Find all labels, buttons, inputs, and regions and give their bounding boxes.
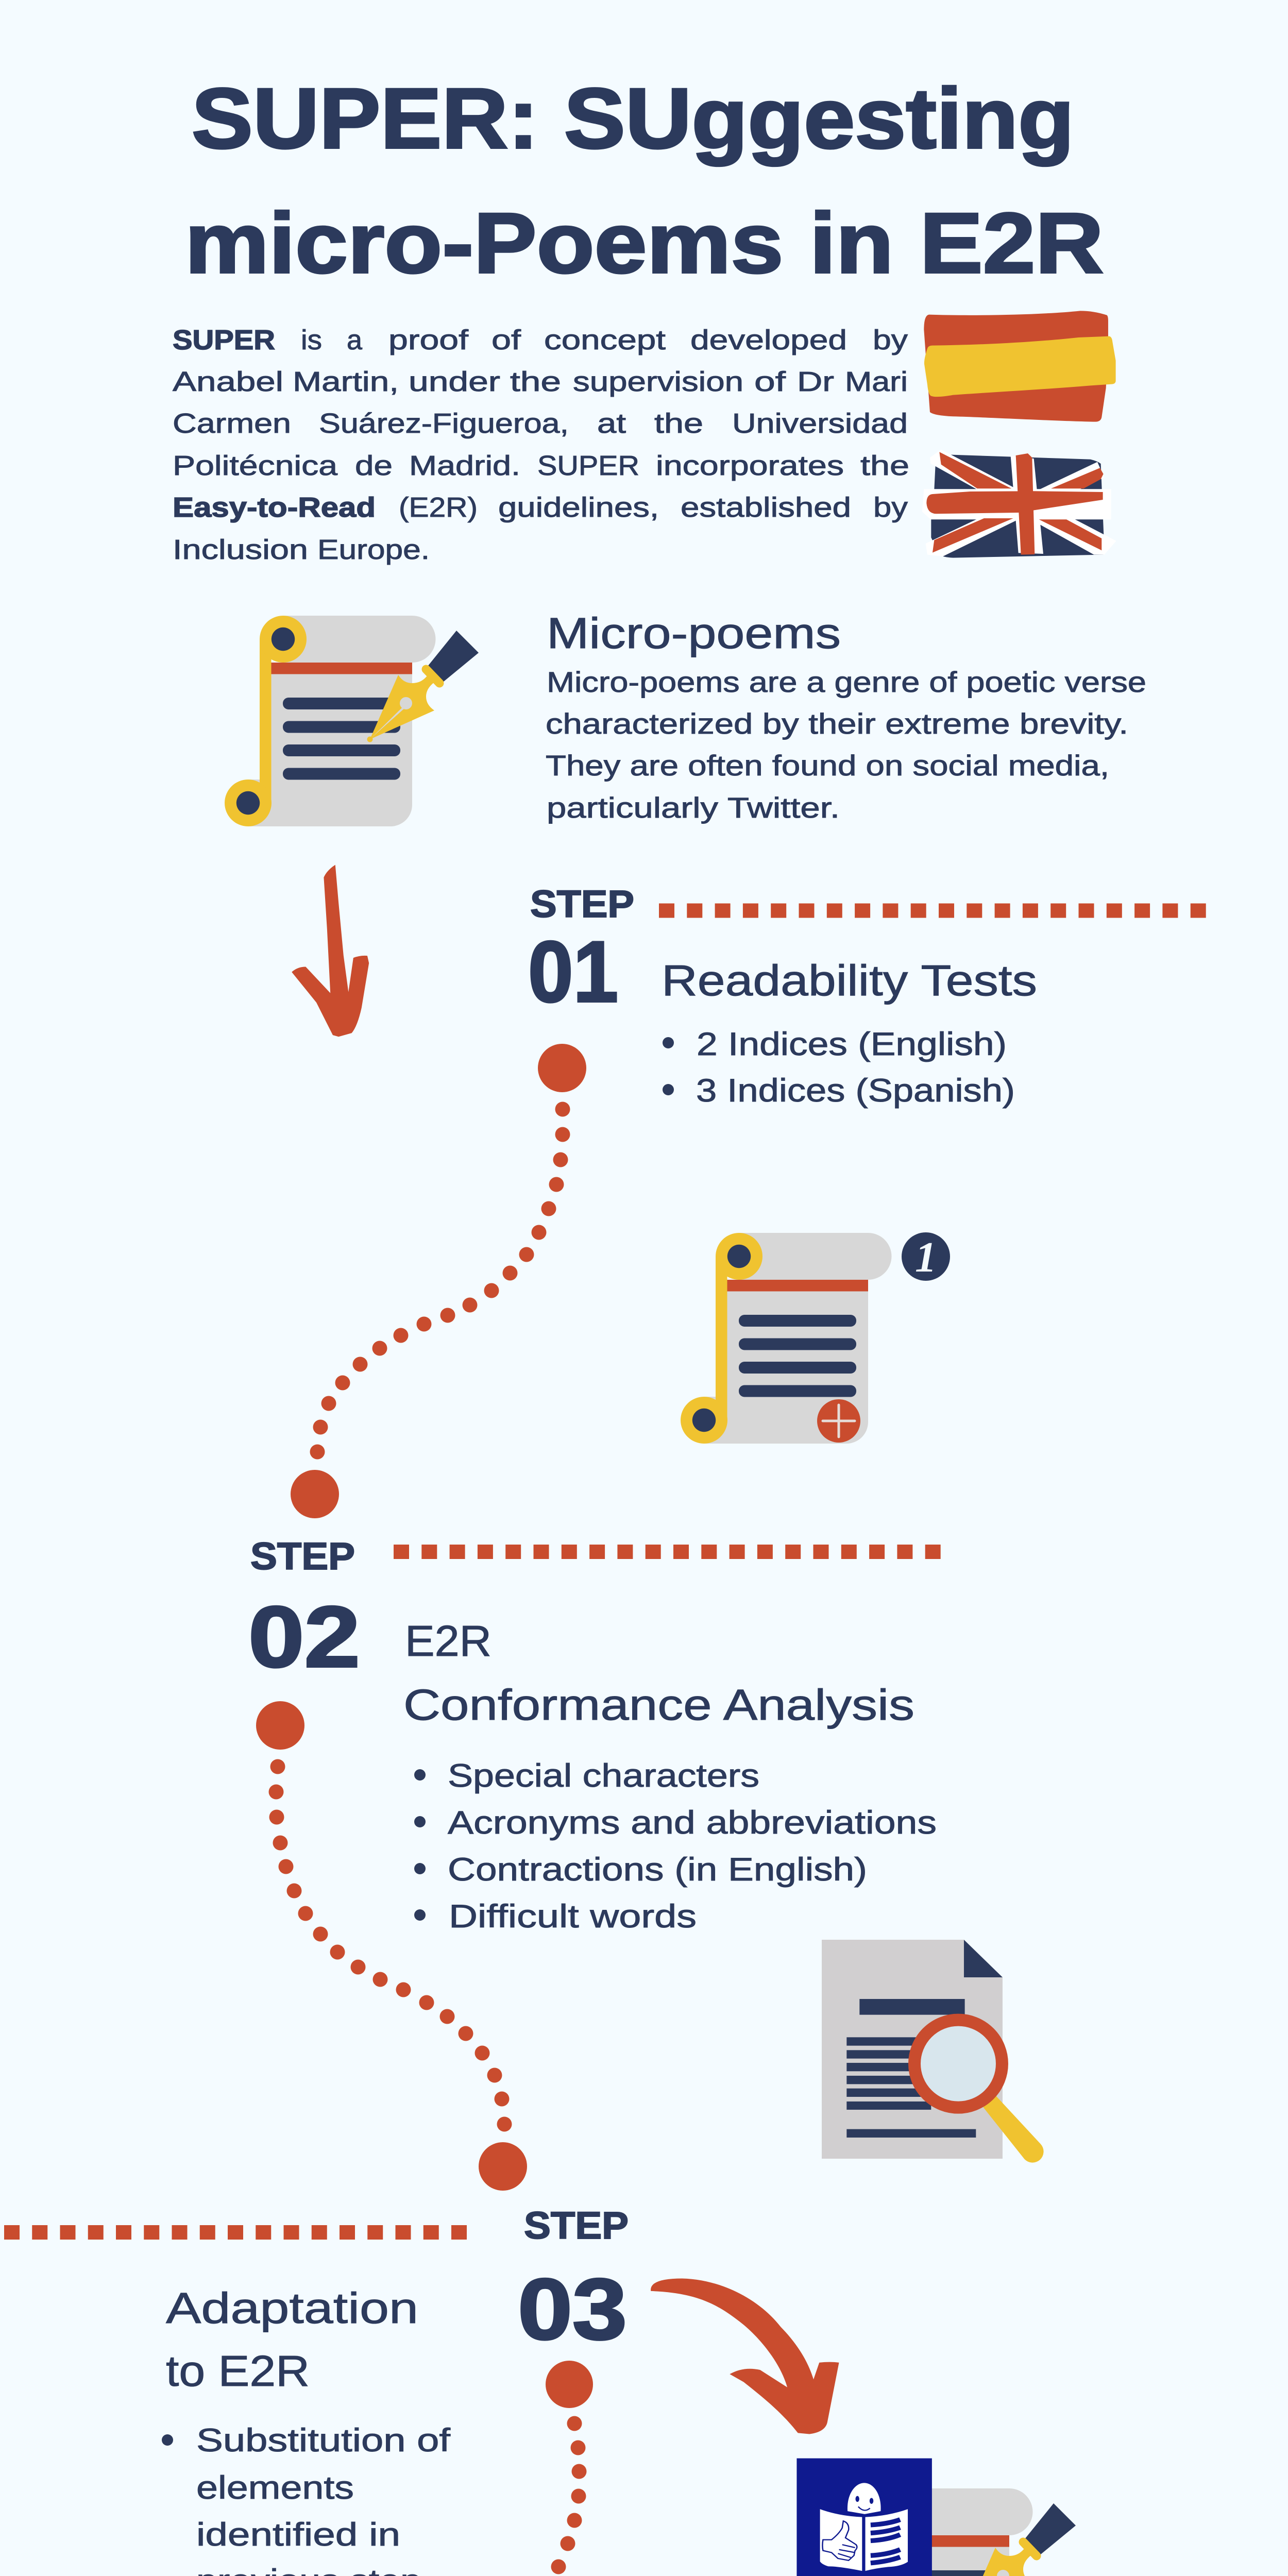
step 3 text: identified in xyxy=(196,2517,400,2553)
text block: introduction: the xyxy=(510,366,561,397)
icon: scroll with plus and 1: 1 xyxy=(915,1233,937,1281)
step 3 heading xyxy=(518,2204,629,2358)
micro-poems section: Micro-poems are a genre of poetic verse xyxy=(547,666,1146,698)
step 1 text: 3 Indices (Spanish) xyxy=(696,1073,1015,1109)
text block: introduction: SUPER xyxy=(173,325,275,355)
text block: introduction: established xyxy=(681,492,851,523)
text block: introduction: concept xyxy=(544,325,666,355)
text block: introduction: by xyxy=(873,325,908,355)
text block: introduction: Carmen xyxy=(173,408,291,439)
micro-poems section: characterized by their extreme brevity. xyxy=(546,707,1128,740)
text block: introduction: Universidad xyxy=(732,408,908,439)
text block: introduction: under xyxy=(409,366,500,397)
text block: introduction: Martin, xyxy=(293,366,399,397)
step 3 text xyxy=(162,2284,451,2576)
text block: introduction: (E2R) xyxy=(399,492,478,523)
step 2 text: E2R xyxy=(405,1617,492,1665)
step 2 text: Conformance Analysis xyxy=(403,1681,914,1729)
text block: introduction: the xyxy=(654,408,703,439)
text block: introduction: developed xyxy=(690,325,847,355)
icon: scroll with pen and easy-to-read logo xyxy=(796,2459,1076,2576)
step 3 text: elements xyxy=(196,2470,354,2506)
step 2 heading xyxy=(248,1535,360,1685)
step 3 text: Adaptation xyxy=(166,2284,418,2332)
arrow: down to step 1 xyxy=(292,865,369,1037)
text block: introduction: of xyxy=(754,366,786,397)
text block: introduction: guidelines, xyxy=(498,492,659,523)
text block: introduction: a xyxy=(347,325,363,355)
step 3 heading: 03 xyxy=(518,2261,627,2358)
text block: introduction: the xyxy=(860,450,909,481)
text block: introduction: Madrid. xyxy=(409,450,520,481)
step 3 text: Substitution of xyxy=(196,2422,451,2459)
dotted path: step 1 to step 2 xyxy=(291,1044,586,1518)
icon: document with magnifier xyxy=(822,1940,1044,2163)
step 2 text xyxy=(403,1617,937,1935)
step 1 text: 2 Indices (English) xyxy=(697,1026,1007,1062)
step 1 text: Readability Tests xyxy=(662,956,1037,1005)
title: micro-Poems in E2R xyxy=(185,196,1104,291)
title: SUPER: SUggesting xyxy=(192,71,1074,166)
icon: british flag xyxy=(922,450,1116,558)
step 1 heading xyxy=(528,883,634,1020)
text block: introduction: Suárez-Figueroa, xyxy=(319,408,569,439)
micro-poems section: Micro-poems xyxy=(547,609,841,657)
text block: introduction: Dr xyxy=(797,366,834,397)
step 2 text: Difficult words xyxy=(449,1899,697,1935)
icon: scroll with pen xyxy=(225,616,479,826)
text block: introduction: Europe. xyxy=(317,534,430,565)
text block: introduction: incorporates xyxy=(656,450,844,481)
step 3 text: to E2R xyxy=(166,2347,310,2395)
arrow: curved to adapted scroll xyxy=(651,2278,839,2434)
micro-poems section xyxy=(546,609,1146,824)
text block: introduction: by xyxy=(873,492,908,523)
text block: introduction: Easy-to-Read xyxy=(173,492,376,523)
text block: introduction: Politécnica xyxy=(173,450,338,481)
micro-poems section: They are often found on social media, xyxy=(546,749,1109,782)
text block: introduction xyxy=(173,325,909,565)
step 1 text xyxy=(662,956,1037,1109)
text block: introduction: at xyxy=(597,408,626,439)
text block: introduction: is xyxy=(301,325,322,355)
icon: spanish flag xyxy=(924,311,1116,422)
text block: introduction: supervision xyxy=(573,366,743,397)
text block: introduction: de xyxy=(355,450,393,481)
step 2 text: Contractions (in English) xyxy=(448,1852,867,1888)
dotted path: step 2 to step 3 xyxy=(256,1701,527,2191)
text block: introduction: of xyxy=(492,325,521,355)
text block: introduction: SUPER xyxy=(537,450,639,481)
step 1 heading: 01 xyxy=(528,923,618,1020)
text block: introduction: Mari xyxy=(845,366,908,397)
dotted path: step 3 to step 4 xyxy=(363,2361,593,2576)
text block: introduction: Inclusion xyxy=(173,534,308,565)
step 2 heading: STEP xyxy=(250,1535,355,1578)
step 2 text: Acronyms and abbreviations xyxy=(448,1805,937,1841)
text block: introduction: Anabel xyxy=(173,366,283,397)
text block: introduction: proof xyxy=(388,325,469,355)
step 3 heading: STEP xyxy=(524,2204,629,2247)
micro-poems section: particularly Twitter. xyxy=(547,791,840,824)
icon: scroll with plus and 1 xyxy=(681,1232,950,1444)
title xyxy=(185,71,1104,291)
step 2 text: Special characters xyxy=(448,1758,759,1794)
step 2 heading: 02 xyxy=(248,1588,360,1685)
step 1 heading: STEP xyxy=(530,883,634,925)
